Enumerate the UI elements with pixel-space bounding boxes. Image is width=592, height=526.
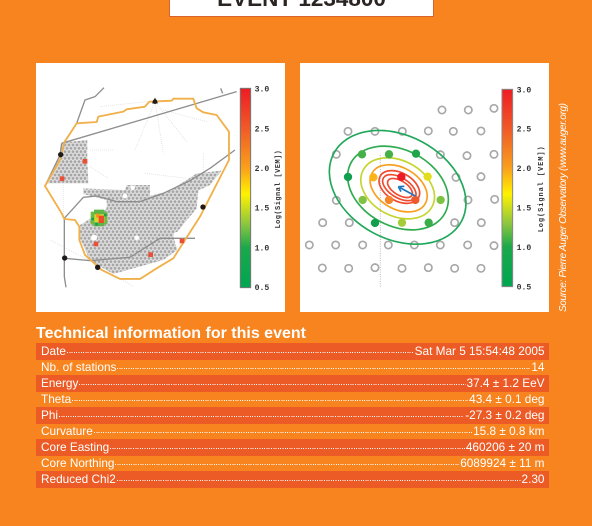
triggered stations xyxy=(344,149,445,227)
colour scale: 1.5 xyxy=(255,205,269,214)
row: phi: Phi xyxy=(41,408,58,422)
panel: event detail xyxy=(300,63,549,312)
row: theta: Theta xyxy=(41,392,71,406)
row: core northing xyxy=(41,456,544,470)
row: core easting: 460206 ± 20 m xyxy=(466,440,544,454)
row: stations xyxy=(41,360,544,374)
array border xyxy=(45,99,229,279)
colour scale: 1.5 xyxy=(517,205,531,214)
row: phi: -27.3 ± 0.2 deg xyxy=(465,408,544,422)
colour scale: 0.5 xyxy=(517,283,531,292)
detector stations grid xyxy=(47,140,222,274)
colour scale xyxy=(240,86,283,293)
colour scale xyxy=(502,86,546,292)
heading: technical information: Technical information for this event xyxy=(36,325,306,342)
colour scale: 2.5 xyxy=(517,126,531,135)
source credit: Source: Pierre Auger Observatory (www.auger.org) xyxy=(558,103,569,312)
row: curvature xyxy=(41,424,544,438)
inactive stations xyxy=(306,105,498,272)
title box xyxy=(169,0,434,17)
row: theta: 43.4 ± 0.1 deg xyxy=(469,392,544,406)
row: core northing: 6089924 ± 11 m xyxy=(460,456,544,470)
row: date xyxy=(36,343,549,360)
colour scale: 0.5 xyxy=(255,284,269,293)
fluorescence sites xyxy=(58,98,206,270)
row: theta xyxy=(41,392,544,406)
row: reduced chi2: 2.30 xyxy=(522,472,544,486)
colour scale: 2.0 xyxy=(517,165,531,174)
colour scale: Log(Signal [VEM]) xyxy=(275,150,283,228)
row: energy: 37.4 ± 1.2 EeV xyxy=(467,376,544,390)
row: curvature: 15.8 ± 0.8 km xyxy=(473,424,544,438)
event footprint xyxy=(91,210,107,226)
table: technical information xyxy=(36,343,549,488)
row: stations: Nb. of stations xyxy=(41,360,116,374)
row: curvature: Curvature xyxy=(41,424,93,438)
roads xyxy=(45,88,237,287)
arrow: shower axis xyxy=(398,186,415,196)
row: reduced chi2: Reduced Chi2 xyxy=(41,472,116,486)
dotted axis xyxy=(379,155,382,287)
colour scale: Log(Signal [VEM]) xyxy=(538,146,546,232)
row: core northing: Core Northing xyxy=(41,456,114,470)
row: energy xyxy=(36,375,549,392)
row: core easting: Core Easting xyxy=(41,440,109,454)
colour scale: 3.0 xyxy=(517,86,531,95)
colour scale: 3.0 xyxy=(255,86,269,95)
colour scale: 1.0 xyxy=(255,244,269,253)
row: stations: 14 xyxy=(531,360,544,374)
row: phi xyxy=(36,407,549,424)
row: date: Date xyxy=(41,344,66,358)
colour scale: 1.0 xyxy=(517,244,531,253)
signal contours xyxy=(310,108,486,267)
row: energy: Energy xyxy=(41,376,78,390)
row: reduced chi2 xyxy=(36,471,549,488)
isolated triggered stations xyxy=(60,159,184,257)
colour scale: 2.0 xyxy=(255,165,269,174)
panel: array map xyxy=(36,63,285,312)
row: core easting xyxy=(36,439,549,456)
colour scale: 2.5 xyxy=(255,125,269,134)
row: date: Sat Mar 5 15:54:48 2005 xyxy=(415,344,544,358)
fluorescence detector view lines xyxy=(50,102,207,287)
